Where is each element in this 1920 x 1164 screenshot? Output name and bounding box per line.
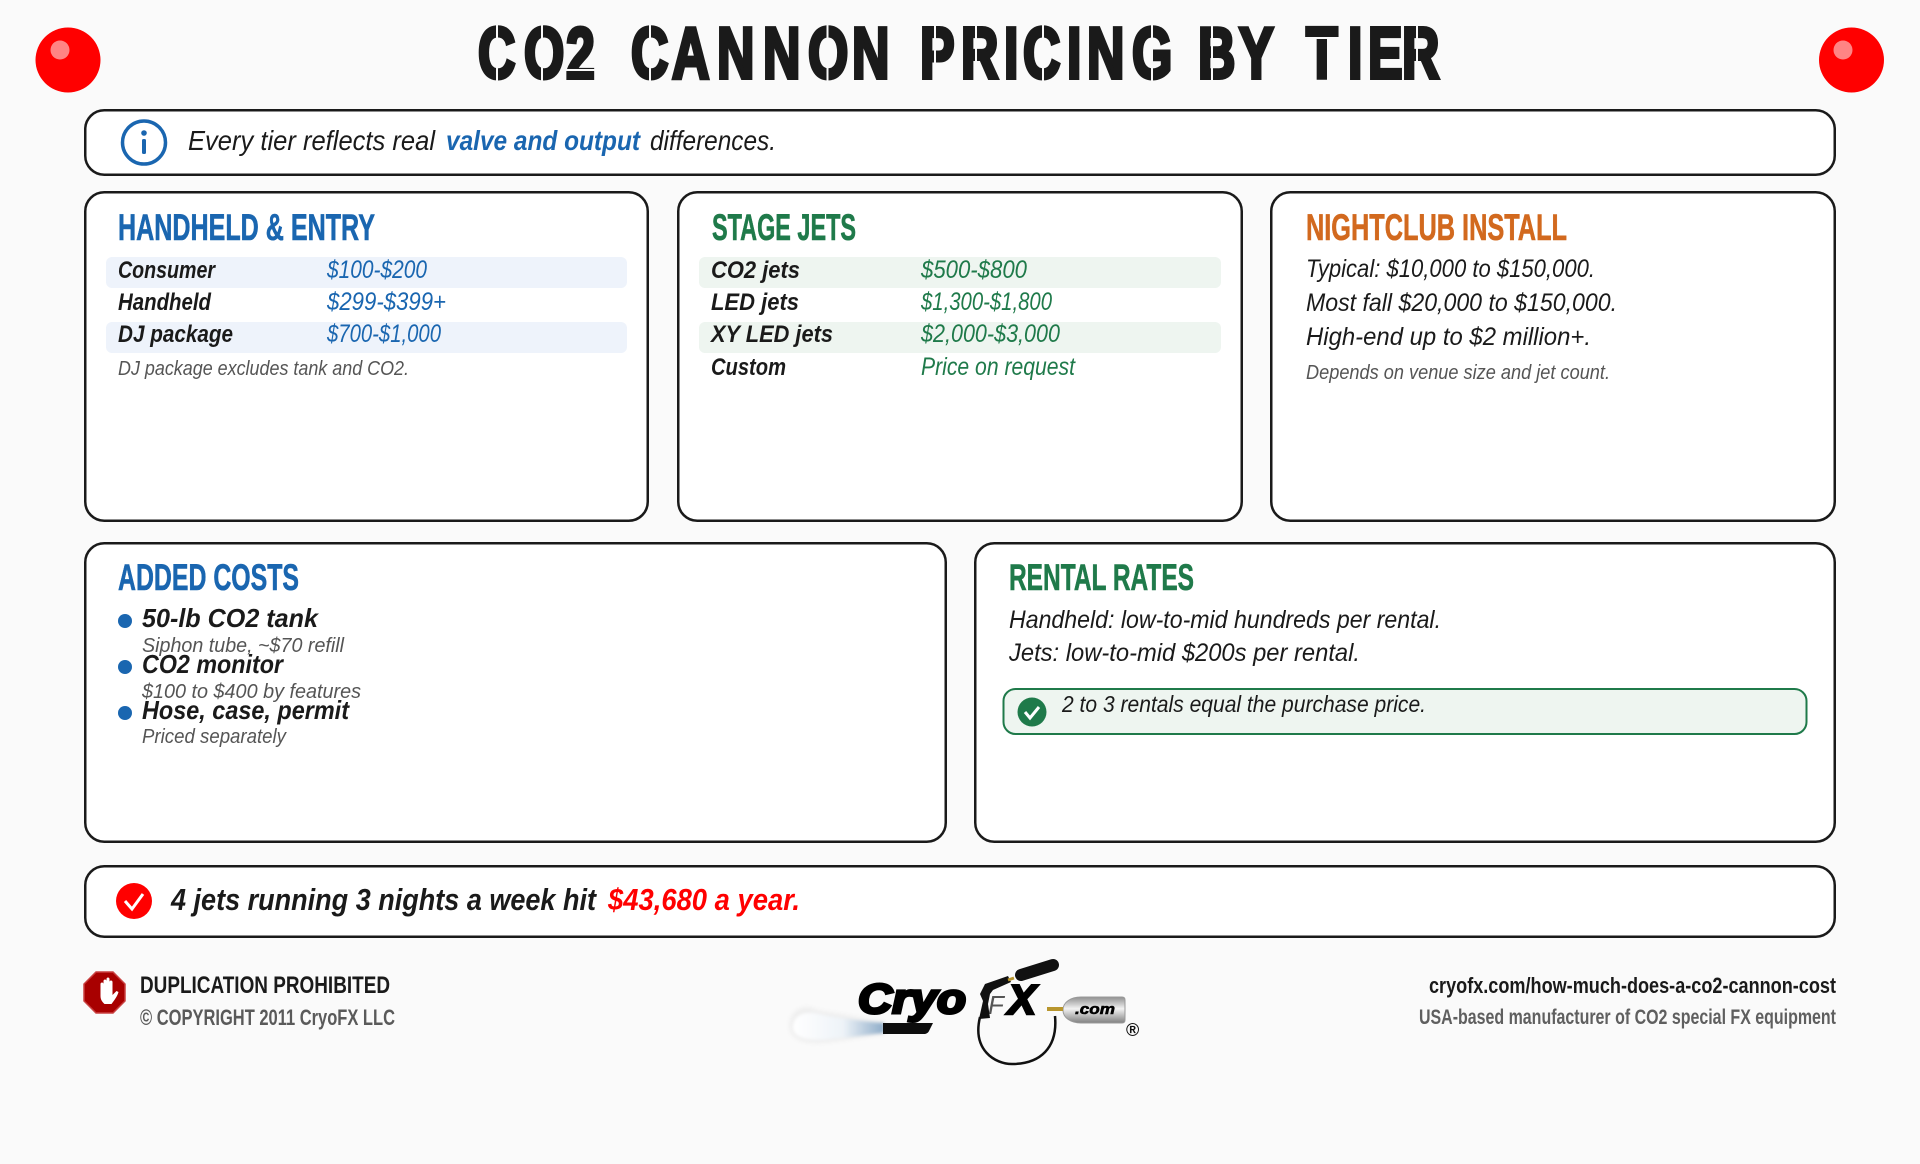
text: info statement: Every tier reflects real bbox=[188, 125, 436, 156]
text: annual cost statement: 4 jets running 3 nights a week hit bbox=[170, 882, 597, 917]
list item: CO2 monitor: $100 to $400 by features bbox=[141, 681, 361, 703]
title: CO2 bbox=[478, 14, 595, 94]
footnote: Depends on venue size and jet count. bbox=[1306, 362, 1610, 384]
price row: XY LED jets bbox=[709, 320, 1060, 348]
panel: annual cost banner bbox=[85, 866, 1835, 937]
heading: stage jets: STAGE JETS bbox=[712, 207, 856, 248]
title: BY bbox=[1198, 14, 1274, 94]
icon: left red dot bbox=[36, 28, 100, 92]
price row: consumer: $100-$200 bbox=[326, 256, 427, 284]
price row: DJ package bbox=[118, 320, 441, 348]
price row: handheld bbox=[118, 288, 446, 316]
title bbox=[478, 14, 1439, 94]
title: PRICING bbox=[920, 14, 1172, 94]
footnote: DJ package excludes tank and CO2. bbox=[118, 358, 409, 380]
heading: added costs: ADDED COSTS bbox=[118, 557, 299, 598]
list item: hose, case, permit: Hose, case, permit bbox=[142, 695, 350, 725]
text: typical range: Typical: $10,000 to $150,000. bbox=[1306, 255, 1595, 283]
panel: added costs bbox=[85, 543, 946, 842]
logo: CO2 tank: .com bbox=[1075, 1001, 1115, 1018]
price row: consumer bbox=[118, 256, 427, 284]
icon: red check bbox=[116, 883, 152, 919]
icon: right red dot bbox=[1819, 28, 1884, 92]
list item: hose, case, permit bbox=[118, 695, 350, 748]
price row: DJ package: $700-$1,000 bbox=[326, 320, 441, 348]
panel: stage jets bbox=[678, 192, 1242, 521]
text: info statement bbox=[188, 125, 776, 156]
logo: CO2 tank bbox=[1047, 997, 1125, 1023]
heading: rental rates: RENTAL RATES bbox=[1009, 557, 1194, 598]
logo: wordmark FX: X bbox=[1006, 976, 1039, 1023]
price row: LED jets: LED jets bbox=[711, 289, 799, 316]
list item: CO2 monitor bbox=[118, 649, 361, 703]
row stripes bbox=[106, 257, 627, 353]
price row: CO2 jets: $500-$800 bbox=[920, 256, 1027, 284]
text: payback statement: 2 to 3 rentals equal the purchase price. bbox=[1061, 691, 1426, 717]
panel: info banner bbox=[85, 110, 1835, 175]
price row: LED jets: $1,300-$1,800 bbox=[920, 288, 1052, 316]
title: TIER bbox=[1306, 14, 1439, 94]
price row: custom: Custom bbox=[711, 354, 786, 381]
logo: vapor cloud bbox=[790, 1007, 884, 1043]
logo: hose bbox=[978, 1016, 1055, 1064]
logo: cannon gun bbox=[979, 965, 1053, 1019]
text: jets rental: Jets: low-to-mid $200s per rental. bbox=[1008, 639, 1360, 667]
panel: rental rates bbox=[975, 543, 1835, 842]
footer: source and manufacturer: cryofx.com/how-much-does-a-co2-cannon-cost bbox=[1429, 973, 1837, 998]
price row: custom bbox=[711, 353, 1076, 381]
price row: handheld: $299-$399+ bbox=[326, 288, 446, 316]
text: info statement: differences. bbox=[650, 125, 776, 156]
callout: payback bbox=[1004, 689, 1806, 734]
icon: info circle bbox=[122, 121, 166, 164]
price row: CO2 jets: CO2 jets bbox=[711, 257, 800, 284]
footer: source and manufacturer bbox=[1419, 973, 1837, 1029]
list item: CO2 tank: Siphon tube, ~$70 refill bbox=[142, 635, 345, 657]
list item: CO2 tank bbox=[118, 603, 345, 657]
text: high end: High-end up to $2 million+. bbox=[1306, 323, 1591, 351]
price row: CO2 jets bbox=[711, 256, 1027, 284]
logo: wordmark Cryo: Cryo bbox=[858, 975, 966, 1022]
footer: duplication notice bbox=[140, 972, 395, 1030]
heading: nightclub install: NIGHTCLUB INSTALL bbox=[1306, 207, 1567, 248]
price row: custom: Price on request bbox=[921, 353, 1076, 381]
heading: handheld and entry: HANDHELD & ENTRY bbox=[118, 207, 375, 248]
panel: nightclub install bbox=[1271, 192, 1835, 521]
list item: CO2 monitor: CO2 monitor bbox=[142, 649, 285, 679]
price row: DJ package: DJ package bbox=[118, 321, 233, 348]
row stripes bbox=[699, 257, 1221, 353]
icon: stop hand bbox=[84, 972, 125, 1013]
text: most fall range: Most fall $20,000 to $150,000. bbox=[1306, 289, 1617, 317]
text: annual cost statement: $43,680 a year. bbox=[607, 882, 800, 917]
logo: wordmark FX: F bbox=[988, 990, 1006, 1020]
price row: XY LED jets: XY LED jets bbox=[709, 321, 833, 348]
list item: hose, case, permit: Priced separately bbox=[142, 726, 287, 748]
footer: duplication notice: © COPYRIGHT 2011 CryoFX LLC bbox=[140, 1005, 395, 1030]
price row: LED jets bbox=[711, 288, 1052, 316]
icon: green check bbox=[1018, 698, 1046, 726]
price row: XY LED jets: $2,000-$3,000 bbox=[920, 320, 1060, 348]
text: info statement: valve and output bbox=[446, 125, 641, 156]
footer: duplication notice: DUPLICATION PROHIBITED bbox=[140, 972, 390, 999]
title: CANNON bbox=[631, 14, 889, 94]
logo: registered mark: ® bbox=[1126, 1020, 1139, 1040]
price row: consumer: Consumer bbox=[118, 257, 216, 284]
price row: handheld: Handheld bbox=[118, 289, 212, 316]
text: handheld rental: Handheld: low-to-mid hundreds per rental. bbox=[1009, 606, 1441, 634]
logo: CryoFX bbox=[790, 965, 1139, 1064]
list item: CO2 tank: 50-lb CO2 tank bbox=[142, 603, 319, 633]
logo: nozzle bar bbox=[883, 1023, 933, 1034]
panel: handheld and entry bbox=[85, 192, 648, 521]
